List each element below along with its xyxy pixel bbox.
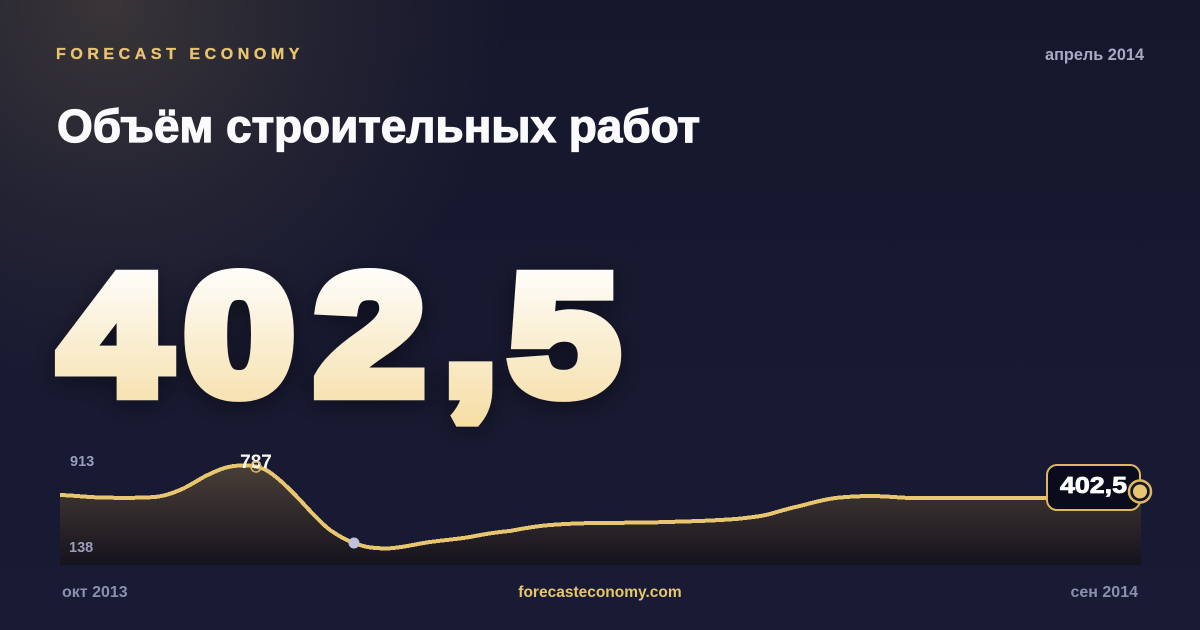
current marker [1129,480,1151,502]
start date: окт 2013 [62,584,128,601]
chart: sparkline [60,452,1151,565]
low marker [348,538,360,548]
peak marker [251,462,261,472]
current value callout [1047,465,1140,510]
line [60,465,1141,548]
end date: сен 2014 [1070,584,1138,601]
axis max: 913 [70,454,94,470]
area under line [60,465,1141,565]
current value callout: 402,5 [1060,472,1127,498]
peak label: 787 [240,452,272,473]
axis min: 138 [69,540,93,556]
site: forecasteconomy.com [518,584,682,601]
brand label: FORECAST ECONOMY [56,46,304,63]
date: апрель 2014 [1045,46,1144,64]
title: Объём строительных работ [57,100,700,152]
main value: 402,5 [60,240,619,430]
